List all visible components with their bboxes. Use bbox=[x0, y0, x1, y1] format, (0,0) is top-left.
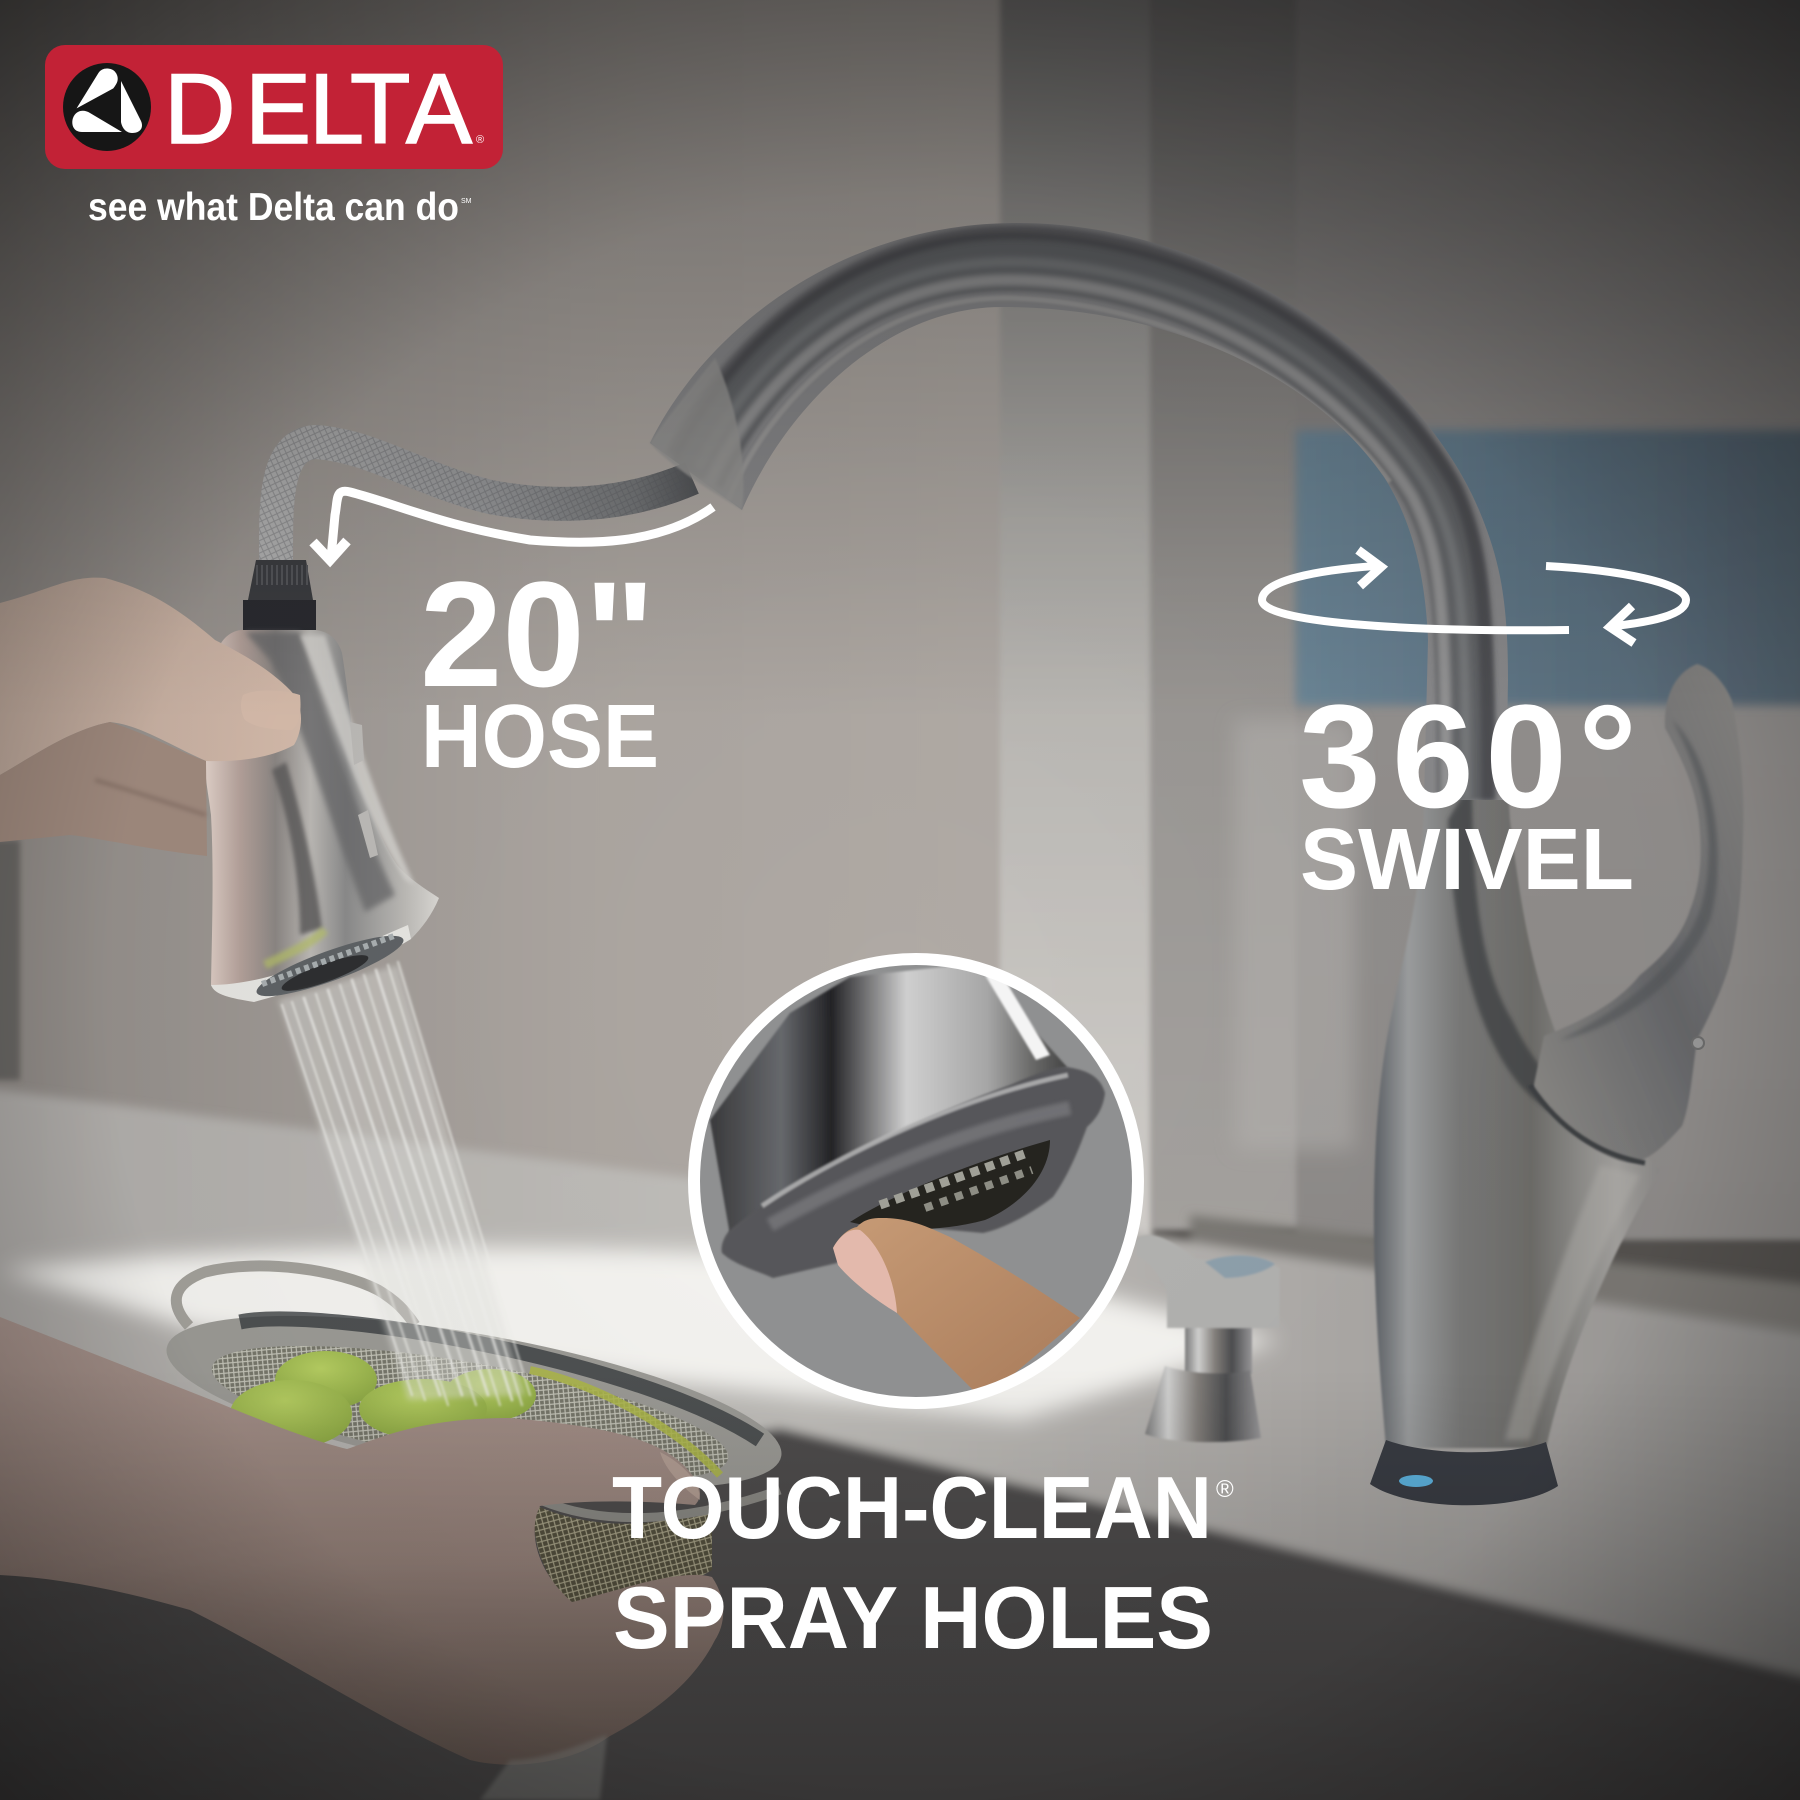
rim highlight bbox=[762, 1075, 1068, 1206]
colander handle bbox=[176, 1266, 415, 1326]
360 degrees number: 360° bbox=[1299, 675, 1637, 839]
inset: touch-clean spray holes close-up bbox=[693, 958, 1139, 1404]
finger creases bbox=[95, 780, 206, 815]
reflected lime glow bbox=[265, 930, 325, 965]
registered mark: ® bbox=[1216, 1476, 1234, 1503]
soap dispenser bbox=[1136, 1235, 1280, 1442]
water spray bbox=[278, 962, 530, 1405]
faucet stem groove bbox=[1448, 780, 1580, 1110]
handle joint line bbox=[1530, 1085, 1645, 1163]
colander with limes bbox=[155, 1266, 793, 1523]
spray holes bbox=[850, 1140, 1050, 1229]
hose connector bbox=[243, 560, 316, 634]
window side frame bbox=[1150, 0, 1300, 1230]
sprayer shoulder shading bbox=[245, 632, 395, 912]
spout nozzle tip over hose bbox=[650, 358, 743, 510]
spray hose bbox=[276, 442, 692, 560]
window sill bbox=[1190, 1215, 1800, 1345]
fingertip bbox=[833, 1218, 1080, 1400]
spout arc bbox=[640, 215, 1520, 815]
touch-clean label: TOUCH-CLEAN bbox=[612, 1458, 1212, 1557]
hose label: HOSE bbox=[421, 687, 659, 787]
sprayer lower dark band bbox=[272, 762, 322, 935]
nozzle rim bbox=[722, 1067, 1105, 1278]
colander mesh inside bbox=[203, 1318, 737, 1508]
faucet body bbox=[1374, 790, 1660, 1448]
nozzle highlight streak bbox=[985, 975, 1050, 1060]
wordmark: DELTA bbox=[164, 53, 472, 164]
sprayer side buttons bbox=[350, 722, 378, 858]
arm and lower hand bbox=[0, 1317, 723, 1765]
faucet handle bbox=[1533, 664, 1743, 1163]
lower fingers bbox=[0, 722, 207, 856]
registered mark: ® bbox=[476, 134, 484, 146]
logo bbox=[45, 45, 503, 229]
rim lower sheen bbox=[770, 1108, 1070, 1225]
light window pane glow bbox=[1235, 720, 1355, 1150]
colander lower rim bbox=[540, 1490, 780, 1518]
inset white ring bbox=[694, 959, 1138, 1403]
sprayer bottom rim bbox=[211, 925, 411, 1002]
service mark: SM bbox=[461, 198, 472, 205]
spray face bbox=[252, 925, 408, 1007]
window pane bbox=[1296, 0, 1800, 1240]
handle screw bbox=[1692, 1037, 1704, 1049]
wet dark rim bbox=[240, 1319, 760, 1440]
lit counter band bbox=[0, 1248, 1280, 1420]
colander rim bbox=[155, 1281, 793, 1523]
callout: touch-clean spray holes bbox=[612, 1458, 1234, 1667]
hose arrowhead bbox=[313, 541, 347, 560]
callout: 360 degree swivel bbox=[1262, 550, 1686, 908]
handle shadow sweep bbox=[1560, 720, 1718, 1040]
left arrowhead bbox=[1358, 550, 1381, 586]
red badge bbox=[45, 45, 503, 169]
spray holes label: SPRAY HOLES bbox=[613, 1568, 1213, 1667]
right arrowhead bbox=[1610, 606, 1634, 643]
right swivel arrow bbox=[1546, 566, 1686, 626]
sprayer curved highlight bbox=[300, 635, 415, 885]
water under hand bbox=[480, 1735, 607, 1800]
blue outdoor view bbox=[1296, 430, 1800, 705]
back of hand and thumb bbox=[0, 578, 301, 775]
fingernail bbox=[833, 1230, 897, 1313]
wall bbox=[0, 0, 1010, 1240]
hose arrow bbox=[331, 491, 713, 558]
20 inch number: 20" bbox=[420, 550, 655, 718]
hand holding sprayer bbox=[0, 578, 301, 856]
dark sink bbox=[0, 1428, 1800, 1800]
blue LED bbox=[1399, 1475, 1433, 1487]
colander lower basket bbox=[534, 1505, 712, 1602]
black touch base bbox=[1370, 1440, 1558, 1505]
left swivel arrow bbox=[1262, 566, 1569, 630]
nozzle body bbox=[710, 965, 1067, 1235]
pull-down sprayer head bbox=[205, 630, 439, 1007]
swivel label: SWIVEL bbox=[1300, 811, 1634, 908]
main faucet bbox=[640, 215, 1743, 1505]
limes bbox=[444, 1369, 536, 1421]
side wall trim bbox=[0, 840, 20, 1080]
inset background bbox=[693, 958, 1139, 1404]
faucet body sheen bbox=[1505, 1165, 1640, 1440]
callout: 20 inch hose bbox=[313, 491, 713, 787]
delta mark bbox=[63, 63, 151, 151]
thumbnail bbox=[241, 690, 301, 730]
window frame column bbox=[1000, 0, 1152, 1240]
tagline: see what Delta can do bbox=[88, 186, 459, 229]
counter top and sink bbox=[0, 1080, 1800, 1800]
